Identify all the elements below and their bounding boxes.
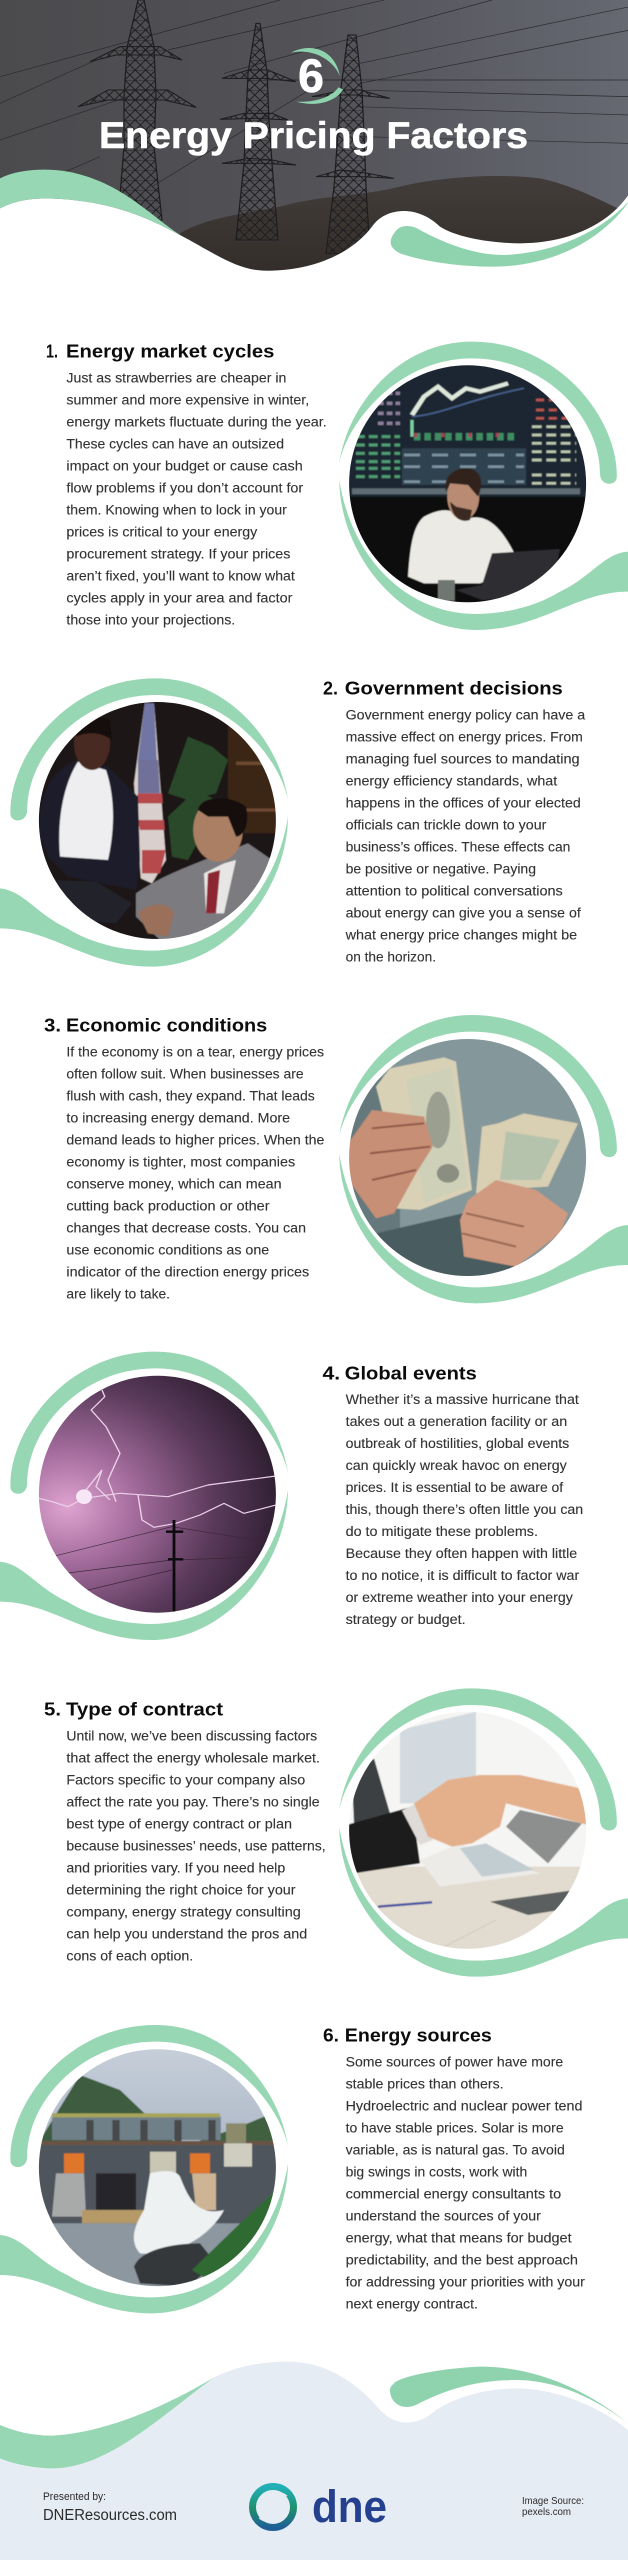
image source credit: Image Source:: [522, 2495, 584, 2507]
body text 1: These cycles can have an outsized: [66, 437, 284, 452]
body text 6: to have stable prices. Solar is more: [346, 2120, 564, 2135]
body text 3: to increasing energy demand. More: [66, 1110, 290, 1125]
body text 4: do to mitigate these problems.: [346, 1524, 538, 1539]
body text 2: happens in the offices of your elected: [346, 795, 581, 810]
ring 4: [0, 1352, 288, 1640]
heading 6: Energy sources: [345, 2025, 492, 2046]
panel: 5 type of contract: [44, 1688, 628, 1977]
panel: footer: [0, 2362, 628, 2560]
green swoosh left: [0, 2377, 214, 2468]
body text 3: changes that decrease costs. You can: [66, 1220, 306, 1235]
body text 6: commercial energy consultants to: [346, 2186, 561, 2201]
body text 5: best type of energy contract or plan: [66, 1816, 292, 1831]
body text 3: demand leads to higher prices. When the: [66, 1132, 324, 1147]
body text 1: impact on your budget or cause cash: [66, 459, 303, 474]
body text 3: conserve money, which can mean: [66, 1176, 282, 1191]
body text 6: [346, 2054, 585, 2311]
body text 4: this, though there’s often little you can: [346, 1502, 583, 1517]
heading 3: Economic conditions: [66, 1015, 267, 1036]
body text 5: that affect the energy wholesale market.: [66, 1750, 320, 1765]
logo ring: [252, 2486, 294, 2528]
presenter credit: [43, 2491, 177, 2524]
heading 4: 4.: [322, 1362, 340, 1383]
body text 5: company, energy strategy consulting: [66, 1904, 301, 1919]
ring 2: [0, 678, 288, 967]
body text 6: for addressing your priorities with your: [346, 2274, 585, 2289]
heading 5: 5.: [44, 1699, 61, 1720]
body text 1: procurement strategy. If your prices: [66, 547, 291, 562]
ring 1: [339, 342, 628, 630]
body text 4: takes out a generation facility or an: [346, 1414, 567, 1429]
body text 5: Factors specific to your company also: [66, 1772, 305, 1787]
heading 2: 2.: [323, 677, 338, 698]
green swoosh left: [0, 170, 180, 235]
body text 3: use economic conditions as one: [66, 1242, 269, 1257]
body text 2: attention to political conversations: [346, 883, 563, 898]
photo 3: hands holding cash: [344, 1035, 592, 1283]
ring 6: [0, 2025, 288, 2313]
body text 4: Whether it’s a massive hurricane that: [346, 1392, 579, 1407]
panel: 6 energy sources: [0, 2025, 585, 2313]
heading 1: Energy market cycles: [66, 341, 274, 362]
body text 3: If the economy is on a tear, energy prices: [66, 1044, 324, 1059]
body text 2: energy efficiency standards, what: [346, 773, 557, 788]
body text 2: business’s offices. These effects can: [346, 839, 570, 854]
body text 5: cons of each option.: [66, 1948, 193, 1963]
panel: 3 economic conditions: [44, 1015, 628, 1303]
heading 2: Government decisions: [345, 677, 563, 698]
body text 2: officials can trickle down to your: [346, 817, 547, 832]
body text 4: strategy or budget.: [346, 1612, 466, 1627]
body text 6: Hydroelectric and nuclear power tend: [346, 2098, 582, 2113]
presenter credit: DNEResources.com: [43, 2507, 177, 2524]
body text 2: Government energy policy can have a: [346, 707, 586, 722]
panel: 4 global events: [0, 1352, 583, 1640]
body text 6: big swings in costs, work with: [346, 2164, 527, 2179]
body text 5: affect the rate you pay. There’s no single: [66, 1794, 320, 1809]
panel: 1 energy market cycles: [46, 341, 628, 630]
heading 5: Type of contract: [66, 1699, 223, 1720]
body text 3: are likely to take.: [66, 1286, 170, 1301]
logo wordmark: dne: [312, 2481, 387, 2532]
photo 4: lightning storm: [34, 1372, 282, 1617]
body text 5: determining the right choice for your: [66, 1882, 296, 1897]
body text 3: economy is tighter, most companies: [66, 1154, 296, 1169]
body text 1: energy markets fluctuate during the year.: [66, 415, 327, 430]
heading 1: 1.: [46, 341, 58, 362]
body text 4: can quickly wreak havoc on energy: [346, 1458, 567, 1473]
body text 1: flow problems if you don’t account for: [66, 481, 304, 496]
body text 1: [66, 371, 327, 628]
body text 1: prices is critical to your energy: [66, 525, 258, 540]
photo 2: officials at flag: [34, 698, 282, 943]
body text 3: often follow suit. When businesses are: [66, 1066, 304, 1081]
body text 2: be positive or negative. Paying: [346, 861, 536, 876]
body text 3: cutting back production or other: [66, 1198, 270, 1213]
body text 2: about energy can give you a sense of: [346, 905, 581, 920]
body text 5: Until now, we’ve been discussing factors: [66, 1728, 318, 1743]
title: Energy Pricing Factors: [99, 115, 528, 156]
heading 4: Global events: [345, 1362, 477, 1383]
body text 6: variable, as is natural gas. To avoid: [346, 2142, 565, 2157]
white wave: [0, 193, 628, 333]
body text 4: or extreme weather into your energy: [346, 1590, 573, 1605]
body text 1: aren’t fixed, you’ll want to know what: [66, 569, 295, 584]
body text 2: on the horizon.: [346, 949, 436, 964]
body text 1: cycles apply in your area and factor: [66, 591, 293, 606]
body text 5: [66, 1728, 326, 1963]
image source credit: [522, 2495, 584, 2518]
header photo: transmission towers: [0, 0, 628, 277]
ring 3: [339, 1015, 628, 1303]
body text 1: summer and more expensive in winter,: [66, 393, 309, 408]
heading 6: 6.: [323, 2025, 339, 2046]
body text 6: energy, what that means for budget: [346, 2230, 572, 2245]
photo 1: trader at screens: [344, 362, 592, 607]
body text 5: can help you understand the pros and: [66, 1926, 307, 1941]
body text 4: prices. It is essential to be aware of: [346, 1480, 563, 1495]
heading 3: 3.: [44, 1015, 61, 1036]
footer background wave: [0, 2362, 628, 2560]
photo 6: hydroelectric dam: [34, 2045, 282, 2290]
ring 5: [339, 1688, 628, 1977]
body text 6: predictability, and the best approach: [346, 2252, 578, 2267]
presenter credit: Presented by:: [43, 2491, 106, 2503]
body text 3: [66, 1044, 324, 1301]
body text 2: [345, 707, 586, 964]
dne logo: [252, 2481, 387, 2532]
green swoosh right: [391, 200, 628, 267]
body text 6: Some sources of power have more: [346, 2054, 563, 2069]
body text 3: flush with cash, they expand. That leads: [66, 1088, 315, 1103]
number ring: [291, 48, 343, 104]
body text 2: what energy price changes might be: [345, 927, 577, 942]
body text 4: to no notice, it is difficult to factor war: [346, 1568, 580, 1583]
body text 6: understand the sources of your: [346, 2208, 541, 2223]
body text 2: massive effect on energy prices. From: [346, 729, 583, 744]
panel: header: [0, 0, 628, 333]
big number: 6: [298, 49, 324, 102]
body text 6: stable prices than others.: [346, 2076, 504, 2091]
body text 4: outbreak of hostilities, global events: [346, 1436, 570, 1451]
body text 1: Just as strawberries are cheaper in: [66, 371, 286, 386]
body text 5: because businesses’ needs, use patterns,: [66, 1838, 326, 1853]
body text 4: Because they often happen with little: [346, 1546, 577, 1561]
body text 6: next energy contract.: [346, 2296, 478, 2311]
body text 1: those into your projections.: [66, 613, 235, 628]
body text 3: indicator of the direction energy prices: [66, 1264, 310, 1279]
photo 5: business handshake: [344, 1708, 592, 1953]
body text 2: managing fuel sources to mandating: [346, 751, 580, 766]
body text 1: them. Knowing when to lock in your: [66, 503, 287, 518]
green swoosh right: [390, 2367, 628, 2425]
image source credit: pexels.com: [522, 2506, 571, 2518]
body text 4: [346, 1392, 583, 1627]
panel: 2 government decisions: [0, 677, 586, 967]
body text 5: and priorities vary. If you need help: [66, 1860, 285, 1875]
